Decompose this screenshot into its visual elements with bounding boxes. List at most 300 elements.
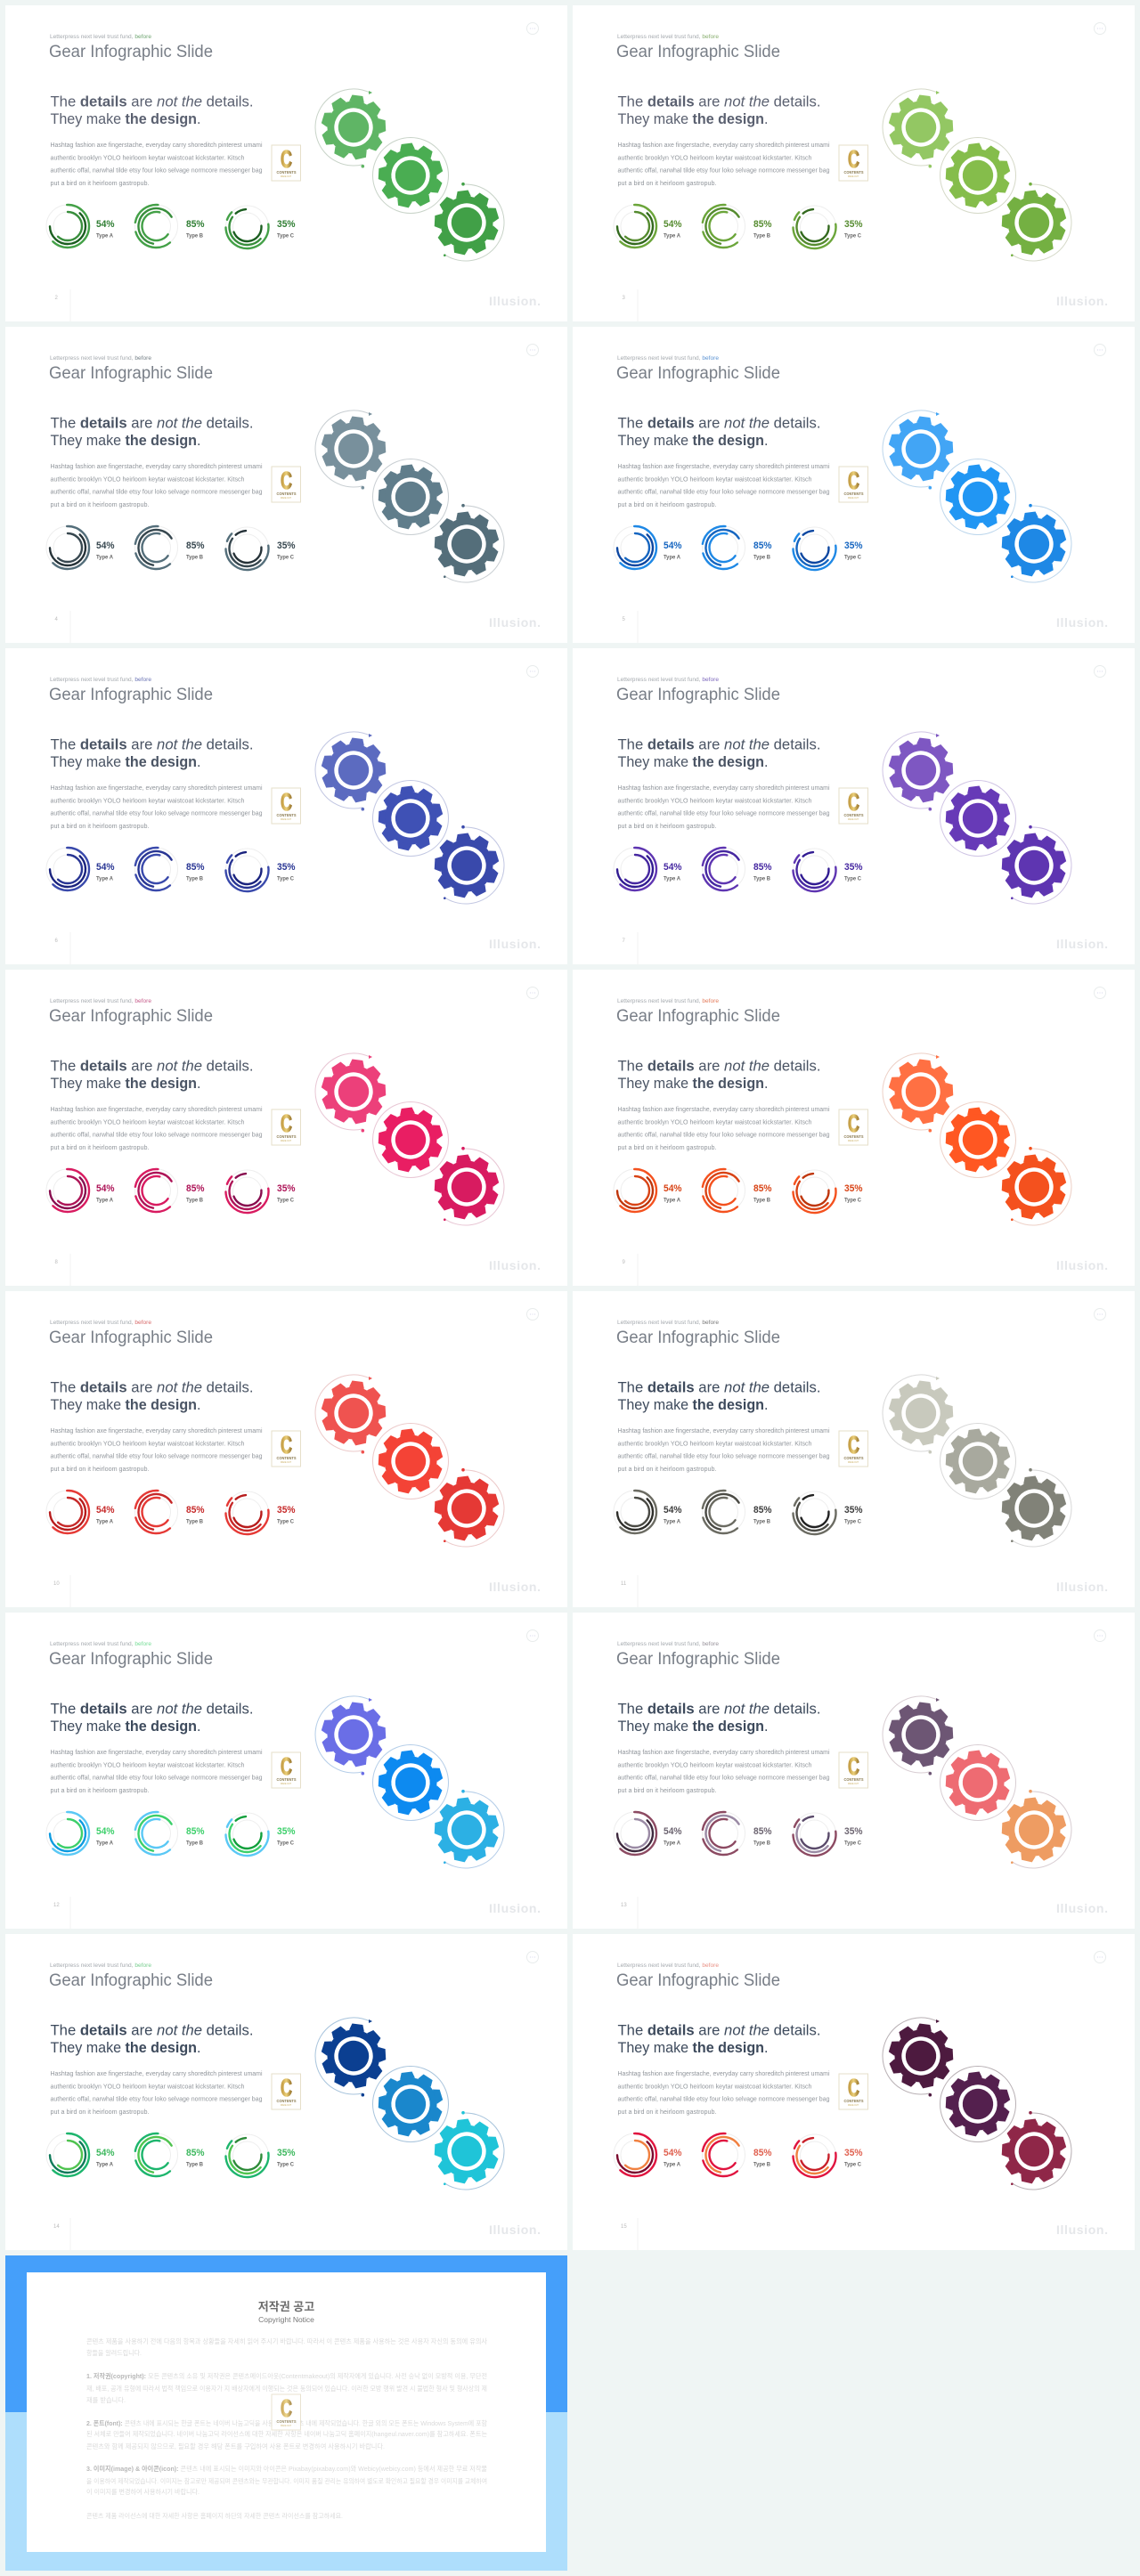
- logo: C: [848, 145, 859, 173]
- body text: [50, 785, 263, 830]
- donut chart: Type C: 35%: [277, 1826, 296, 1837]
- notice body text: 재, 배포, 공개 유형에 따라서 법적 책임으로 이용자가 지 배상자에게 이행되는 것은 동의되어 있습니다. 이러한 모방 행위 발견 시 불법한 형사 및 형사상의 제: [86, 2384, 487, 2393]
- logo: [272, 467, 301, 502]
- slide background: [573, 327, 1135, 643]
- logo: CONTENTS: [276, 492, 297, 496]
- donut chart: Type C: 35%: [844, 1183, 863, 1194]
- slide background: [5, 327, 567, 643]
- donut chart: Type C: 35%: [844, 219, 863, 230]
- blue backdrop top: [5, 2255, 567, 2412]
- headline: The details are not the details.: [618, 1378, 821, 1396]
- donut chart: Type B: Type B: [186, 233, 203, 239]
- donut chart: Type C: 35%: [844, 2148, 863, 2158]
- title: Gear Infographic Slide: [616, 1329, 780, 1347]
- body text: authentic offal, narwhal tilde etsy four loko selvage normcore messenger bag: [50, 2096, 263, 2103]
- donut chart: Type B: 85%: [186, 540, 205, 551]
- logo: CONTENTS: [844, 813, 864, 817]
- donut chart: Type C: Type C: [277, 1840, 294, 1847]
- notice title: 저작권 공고: [258, 2300, 314, 2313]
- logo: MAKE OUT: [281, 1139, 291, 1142]
- logo: [272, 1752, 301, 1788]
- brand: Illusion.: [489, 294, 541, 308]
- logo: [839, 1109, 867, 1145]
- donut chart: Type B: Type B: [186, 1840, 203, 1847]
- gear 2 with orbit ring: [940, 1423, 1015, 1499]
- page number: 7: [622, 939, 625, 944]
- eyebrow text: Letterpress next level trust fund, before: [50, 355, 151, 362]
- logo: C: [281, 1752, 292, 1780]
- panel: slide 8 pink: [5, 970, 567, 1286]
- title: Gear Infographic Slide: [49, 1650, 213, 1669]
- body text: put a bird on it heirloom gastropub.: [50, 502, 150, 508]
- headline: The details are not the details.: [50, 1058, 253, 1074]
- donut chart: Type B: 85%: [753, 2148, 772, 2158]
- headline: [50, 735, 253, 770]
- eyebrow text: Letterpress next level trust fund, before: [617, 34, 719, 40]
- headline: The details are not the details.: [50, 415, 253, 431]
- notice body text: 이 이미지를 변경하여 사용하시기 바랍니다.: [86, 2487, 200, 2496]
- logo: CONTENTS: [276, 2099, 297, 2103]
- donut chart: Type A: 54%: [664, 540, 682, 551]
- donut chart: Type A: Type A: [664, 233, 680, 239]
- donut chart: Type C: [787, 2128, 863, 2183]
- donut chart: Type A: Type A: [96, 2162, 113, 2167]
- body text: Hashtag fashion axe fingerstache, everyday carry shoreditch pinterest umami: [618, 785, 830, 792]
- body text: put a bird on it heirloom gastropub.: [618, 181, 717, 187]
- donut chart: Type A: [43, 1808, 115, 1858]
- donut chart: Type B: [694, 839, 772, 899]
- donut chart: Type A: 54%: [664, 1505, 682, 1516]
- page number: 13: [621, 1903, 627, 1908]
- body text: Hashtag fashion axe fingerstache, everyday carry shoreditch pinterest umami: [618, 1428, 830, 1434]
- logo: CONTENTS: [844, 1134, 864, 1139]
- gear 2 with orbit ring: [372, 1423, 449, 1499]
- headline: [618, 1058, 821, 1092]
- logo: CONTENTS: [276, 1134, 297, 1139]
- donut chart: Type B: [126, 1803, 205, 1864]
- title: Gear Infographic Slide: [49, 364, 213, 383]
- gear 3 with orbit arrow: [424, 502, 508, 586]
- body text: authentic brooklyn YOLO heirloom keytar waistcoat kickstarter. Kitsch: [50, 798, 245, 805]
- headline: The details are not the details.: [618, 2021, 821, 2039]
- donut chart: Type B: Type B: [186, 554, 203, 561]
- icon: more menu: [1094, 666, 1106, 677]
- donut chart: Type B: Type B: [753, 1519, 770, 1524]
- notice body text: [86, 2336, 487, 2520]
- body text: authentic brooklyn YOLO heirloom keytar waistcoat kickstarter. Kitsch: [618, 1120, 812, 1125]
- donut chart: Type A: [43, 844, 115, 894]
- body text: authentic brooklyn YOLO heirloom keytar waistcoat kickstarter. Kitsch: [618, 477, 812, 483]
- headline: They make the design.: [50, 2039, 201, 2056]
- body text: Hashtag fashion axe fingerstache, everyday carry shoreditch pinterest umami: [618, 142, 830, 149]
- donut chart: Type C: Type C: [844, 554, 861, 561]
- icon: more menu: [527, 344, 538, 356]
- body text: authentic brooklyn YOLO heirloom keytar waistcoat kickstarter. Kitsch: [50, 155, 245, 162]
- donut chart: Type B: [126, 2125, 205, 2185]
- body text: Hashtag fashion axe fingerstache, everyday carry shoreditch pinterest umami: [50, 1428, 263, 1434]
- logo: [272, 1109, 301, 1145]
- eyebrow text: Letterpress next level trust fund, before: [50, 998, 151, 1004]
- body text: authentic brooklyn YOLO heirloom keytar waistcoat kickstarter. Kitsch: [50, 1763, 245, 1768]
- body text: authentic offal, narwhal tilde etsy four loko selvage normcore messenger bag: [50, 1776, 263, 1781]
- logo: CONTENTS: [276, 1456, 297, 1460]
- donut chart: Type C: 35%: [277, 219, 296, 230]
- panel: slide 14 navy blue teal: [5, 1934, 567, 2250]
- eyebrow text: Letterpress next level trust fund, before: [617, 1320, 719, 1326]
- panel: slide 4 blue grey: [5, 327, 567, 643]
- donut chart: Type A: [43, 2130, 115, 2180]
- logo: C: [281, 467, 292, 494]
- donut chart: Type B: 85%: [186, 1826, 205, 1837]
- body text: authentic offal, narwhal tilde etsy four loko selvage normcore messenger bag: [618, 810, 830, 817]
- logo: C: [848, 2074, 859, 2101]
- headline: [618, 93, 821, 127]
- gear 2 with orbit ring: [372, 137, 449, 214]
- donut chart: Type B: [694, 2125, 772, 2185]
- donut chart: Type B: Type B: [186, 1197, 203, 1204]
- notice body text: 2. 폰트(font): 콘텐츠 내에 표시되는 한글 폰트는 네이버 나눔고딕을 사용하여 콘텐츠 내에 제작되었습니다. 한글 외의 모든 폰트는 Windows System에 포함: [86, 2418, 487, 2427]
- logo: CONTENTS: [844, 170, 864, 175]
- body text: Hashtag fashion axe fingerstache, everyday carry shoreditch pinterest umami: [618, 1107, 830, 1113]
- gear 2 with orbit ring: [372, 459, 449, 534]
- logo: C: [281, 1431, 292, 1459]
- donut chart: Type B: Type B: [753, 876, 770, 882]
- logo: MAKE OUT: [848, 496, 859, 500]
- logo: [272, 788, 301, 824]
- headline: They make the design.: [50, 1396, 201, 1413]
- donut chart: Type B: [126, 1482, 205, 1542]
- body text: [618, 1107, 830, 1151]
- headline: They make the design.: [618, 1396, 768, 1413]
- donut chart: Type C: Type C: [277, 554, 294, 561]
- donut chart: Type C: [220, 1164, 296, 1219]
- icon: more menu: [1094, 344, 1106, 356]
- title: Gear Infographic Slide: [616, 43, 780, 61]
- body text: [50, 464, 263, 508]
- logo: MAKE OUT: [281, 1782, 291, 1785]
- donut chart: Type A: [43, 1487, 115, 1537]
- donut chart: Type A: [610, 1487, 682, 1537]
- gear 3 with orbit arrow: [991, 1467, 1075, 1550]
- icon: more menu: [1094, 1629, 1106, 1642]
- donut chart: Type C: [220, 2128, 296, 2183]
- page number: 10: [53, 1581, 60, 1587]
- donut chart: Type B: 85%: [753, 1505, 772, 1516]
- gear 2 with orbit ring: [940, 1745, 1015, 1820]
- donut chart: Type C: Type C: [277, 233, 294, 239]
- headline: They make the design.: [50, 432, 201, 449]
- donut chart: Type B: 85%: [186, 1505, 205, 1516]
- donut chart: Type C: 35%: [277, 1183, 296, 1194]
- gear 3 with orbit arrow: [991, 824, 1075, 907]
- slide background: [573, 1934, 1135, 2250]
- donut chart: Type C: Type C: [844, 1519, 861, 1524]
- donut chart: Type B: [126, 839, 205, 899]
- donut chart: Type B: [694, 517, 772, 578]
- title: Gear Infographic Slide: [616, 1650, 780, 1669]
- headline: They make the design.: [618, 1075, 768, 1092]
- donut chart: Type A: [43, 1166, 115, 1215]
- headline: The details are not the details.: [618, 1701, 821, 1717]
- logo: C: [848, 1752, 859, 1780]
- donut chart: Type B: Type B: [753, 554, 770, 561]
- body text: authentic offal, narwhal tilde etsy four loko selvage normcore messenger bag: [618, 1776, 830, 1781]
- body text: put a bird on it heirloom gastropub.: [618, 1788, 717, 1794]
- logo: MAKE OUT: [281, 1460, 291, 1464]
- body text: authentic brooklyn YOLO heirloom keytar waistcoat kickstarter. Kitsch: [50, 1441, 245, 1448]
- headline: The details are not the details.: [50, 735, 253, 753]
- notice subtitle: Copyright Notice: [258, 2315, 314, 2324]
- headline: [618, 735, 821, 770]
- donut chart: Type C: 35%: [277, 2148, 296, 2158]
- donut chart: Type C: Type C: [277, 1519, 294, 1524]
- body text: [618, 1428, 830, 1473]
- headline: They make the design.: [50, 110, 201, 127]
- gear 2 with orbit ring: [940, 137, 1015, 214]
- body text: [618, 2071, 830, 2116]
- logo: C: [848, 1431, 859, 1459]
- body text: authentic brooklyn YOLO heirloom keytar waistcoat kickstarter. Kitsch: [618, 1441, 812, 1448]
- headline: The details are not the details.: [618, 1058, 821, 1074]
- panel: slide 2 green: [5, 5, 567, 321]
- headline: [618, 415, 821, 449]
- brand: Illusion.: [489, 1258, 541, 1272]
- title: Gear Infographic Slide: [49, 1971, 213, 1990]
- donut chart: Type B: Type B: [753, 1197, 770, 1204]
- panel: copyright notice: [5, 2255, 567, 2571]
- title: Gear Infographic Slide: [49, 1329, 213, 1347]
- eyebrow text: Letterpress next level trust fund, before: [50, 1320, 151, 1326]
- notice body text: 3. 이미지(image) & 아이콘(icon): 콘텐츠 내에 표시되는 이미지와 아이콘은 Pixabay(pixabay.com)와 Webicy(webicy.com) 등에서 제공한 무료 저작물: [86, 2464, 487, 2473]
- headline: The details are not the details.: [50, 1378, 253, 1396]
- donut chart: Type A: 54%: [664, 1826, 682, 1837]
- body text: put a bird on it heirloom gastropub.: [618, 502, 717, 508]
- eyebrow text: Letterpress next level trust fund, before: [617, 677, 719, 683]
- logo: MAKE OUT: [848, 2103, 859, 2107]
- page number: 4: [55, 617, 59, 622]
- donut chart: Type C: 35%: [844, 1826, 863, 1837]
- brand: Illusion.: [489, 937, 541, 951]
- panel: slide 3 light green: [573, 5, 1135, 321]
- gear 1 with orbit arrow: [307, 2010, 400, 2102]
- headline: They make the design.: [618, 753, 768, 770]
- donut chart: Type C: [787, 842, 863, 898]
- logo: CONTENTS: [844, 2099, 864, 2103]
- gear 2 with orbit ring: [940, 780, 1015, 857]
- brand: Illusion.: [489, 615, 541, 630]
- eyebrow text: Letterpress next level trust fund, before: [617, 355, 719, 362]
- notice body text: 콘텐츠 제품 라이선스에 대한 자세한 사항은 홈페이지 하단의 자세한 콘텐츠 라이선스를 참고하세요.: [86, 2511, 343, 2520]
- donut chart: Type B: 85%: [753, 219, 772, 230]
- logo: [839, 1431, 867, 1467]
- logo: CONTENTS: [844, 1777, 864, 1782]
- body text: put a bird on it heirloom gastropub.: [50, 181, 150, 187]
- brand: Illusion.: [1056, 1901, 1108, 1915]
- logo: [839, 788, 867, 824]
- page number: 2: [55, 296, 59, 301]
- gear 2 with orbit ring: [372, 2066, 449, 2142]
- eyebrow text: Letterpress next level trust fund, before: [617, 1962, 719, 1969]
- body text: Hashtag fashion axe fingerstache, everyday carry shoreditch pinterest umami: [50, 1750, 263, 1756]
- headline: [50, 93, 253, 127]
- donut chart: Type C: [787, 1485, 863, 1540]
- gear 3 with orbit arrow: [424, 1145, 508, 1229]
- headline: They make the design.: [50, 1718, 201, 1735]
- eyebrow text: Letterpress next level trust fund, before: [617, 1641, 719, 1647]
- donut chart: Type C: 35%: [844, 540, 863, 551]
- logo: C: [848, 467, 859, 494]
- notice body text: 을 이용하여 제작되었습니다. 이미지는 참고로만 제공되며 콘텐츠와는 무관합니다. 이미지 품질 관리는 유의하여 별도로 확인하고 필요할 경우 이미지를 교체하여: [86, 2476, 487, 2485]
- slide background: [5, 1291, 567, 1607]
- headline: [50, 1058, 253, 1092]
- body text: authentic brooklyn YOLO heirloom keytar waistcoat kickstarter. Kitsch: [618, 155, 812, 162]
- body text: Hashtag fashion axe fingerstache, everyday carry shoreditch pinterest umami: [50, 785, 263, 792]
- logo: MAKE OUT: [281, 496, 291, 500]
- panel: slide 11 warm grey: [573, 1291, 1135, 1607]
- brand: Illusion.: [1056, 2223, 1108, 2237]
- donut chart: Type A: Type A: [664, 1840, 680, 1847]
- body text: put a bird on it heirloom gastropub.: [50, 2109, 150, 2116]
- headline: The details are not the details.: [50, 93, 253, 110]
- headline: They make the design.: [50, 1075, 201, 1092]
- donut chart: Type C: 35%: [277, 1505, 296, 1516]
- gear 3 with orbit arrow: [991, 502, 1075, 586]
- gear 3 with orbit arrow: [991, 1788, 1075, 1872]
- body text: Hashtag fashion axe fingerstache, everyday carry shoreditch pinterest umami: [618, 464, 830, 470]
- gear 3 with orbit arrow: [424, 181, 508, 264]
- logo: [839, 1752, 867, 1788]
- brand: Illusion.: [1056, 1580, 1108, 1594]
- donut chart: Type C: Type C: [277, 2162, 294, 2167]
- logo: C: [848, 1109, 859, 1137]
- body text: authentic brooklyn YOLO heirloom keytar waistcoat kickstarter. Kitsch: [50, 2084, 245, 2091]
- body text: authentic brooklyn YOLO heirloom keytar waistcoat kickstarter. Kitsch: [50, 1120, 245, 1125]
- donut chart: Type A: 54%: [96, 1826, 115, 1837]
- title: Gear Infographic Slide: [616, 1971, 780, 1990]
- donut chart: Type C: [787, 199, 863, 255]
- logo: CONTENTS: [844, 1456, 864, 1460]
- logo: C: [281, 1109, 292, 1137]
- donut chart: Type C: [220, 842, 296, 898]
- donut chart: Type B: Type B: [753, 1840, 770, 1847]
- gear 3 with orbit arrow: [991, 2109, 1075, 2193]
- logo: [272, 145, 301, 181]
- gear 3 with orbit arrow: [991, 181, 1075, 264]
- donut chart: Type A: Type A: [664, 1519, 680, 1524]
- icon: more menu: [1094, 1309, 1106, 1320]
- donut chart: Type B: Type B: [186, 1519, 203, 1524]
- gear 3 with orbit arrow: [424, 2109, 508, 2193]
- gear 1 with orbit arrow: [307, 402, 400, 495]
- donut chart: Type B: [126, 1160, 205, 1221]
- body text: Hashtag fashion axe fingerstache, everyday carry shoreditch pinterest umami: [618, 2071, 830, 2077]
- body text: authentic offal, narwhal tilde etsy four loko selvage normcore messenger bag: [50, 1133, 263, 1138]
- slide background: [573, 1291, 1135, 1607]
- donut chart: Type C: [220, 1807, 296, 1862]
- logo: [839, 145, 867, 181]
- logo: [839, 467, 867, 502]
- donut chart: Type A: [610, 201, 682, 251]
- body text: authentic offal, narwhal tilde etsy four loko selvage normcore messenger bag: [618, 2096, 830, 2103]
- logo: MAKE OUT: [848, 175, 859, 178]
- body text: authentic brooklyn YOLO heirloom keytar waistcoat kickstarter. Kitsch: [618, 2084, 812, 2091]
- donut chart: Type A: 54%: [664, 2148, 682, 2158]
- logo: CONTENTS: [844, 492, 864, 496]
- slide background: [5, 970, 567, 1286]
- panel: slide 7 deep purple: [573, 648, 1135, 964]
- body text: authentic offal, narwhal tilde etsy four loko selvage normcore messenger bag: [618, 490, 830, 495]
- donut chart: Type A: 54%: [96, 2148, 115, 2158]
- slide background: [5, 648, 567, 964]
- brand: Illusion.: [489, 1901, 541, 1915]
- logo: MAKE OUT: [848, 1139, 859, 1142]
- body text: authentic brooklyn YOLO heirloom keytar waistcoat kickstarter. Kitsch: [50, 477, 245, 483]
- donut chart: Type A: Type A: [664, 2162, 680, 2167]
- donut chart: Type A: [43, 201, 115, 251]
- headline: They make the design.: [618, 2039, 768, 2056]
- eyebrow text: Letterpress next level trust fund, before: [50, 1962, 151, 1969]
- page number: 5: [622, 617, 625, 622]
- eyebrow text: Letterpress next level trust fund, before: [50, 1641, 151, 1647]
- title: Gear Infographic Slide: [616, 686, 780, 704]
- gear 1 with orbit arrow: [307, 81, 400, 174]
- gear 1 with orbit arrow: [875, 2010, 967, 2102]
- body text: [50, 1428, 263, 1473]
- donut chart: Type C: Type C: [844, 1197, 861, 1204]
- icon: more menu: [1094, 1952, 1106, 1962]
- panel: slide 15 burgundy: [573, 1934, 1135, 2250]
- donut chart: Type C: Type C: [844, 233, 861, 239]
- donut chart: Type A: [610, 844, 682, 894]
- title: Gear Infographic Slide: [616, 364, 780, 383]
- donut chart: Type B: 85%: [753, 1826, 772, 1837]
- slide background: [573, 5, 1135, 321]
- brand: Illusion.: [489, 2223, 541, 2237]
- body text: Hashtag fashion axe fingerstache, everyday carry shoreditch pinterest umami: [50, 464, 263, 470]
- donut chart: Type A: 54%: [96, 1183, 115, 1194]
- eyebrow text: Letterpress next level trust fund, before: [50, 34, 151, 40]
- gear 2 with orbit ring: [372, 1102, 449, 1177]
- donut chart: Type C: Type C: [844, 2162, 861, 2167]
- body text: Hashtag fashion axe fingerstache, everyday carry shoreditch pinterest umami: [50, 1107, 263, 1113]
- body text: [50, 142, 263, 187]
- notice body text: 항들을 알려드립니다.: [86, 2348, 142, 2357]
- donut chart: Type A: 54%: [96, 540, 115, 551]
- donut chart: Type B: 85%: [186, 1183, 205, 1194]
- logo: [272, 1431, 301, 1467]
- logo: C: [281, 145, 292, 173]
- gear 3 with orbit arrow: [424, 1788, 508, 1872]
- logo: CONTENTS: [276, 2419, 297, 2424]
- gear 1 with orbit arrow: [875, 724, 967, 817]
- donut chart: Type C: [220, 521, 296, 576]
- logo: MAKE OUT: [281, 2424, 291, 2427]
- gear 1 with orbit arrow: [307, 1688, 400, 1781]
- logo: MAKE OUT: [281, 817, 291, 821]
- headline: They make the design.: [50, 753, 201, 770]
- brand: Illusion.: [1056, 1258, 1108, 1272]
- donut chart: Type A: 54%: [664, 862, 682, 873]
- donut chart: Type C: [787, 521, 863, 576]
- donut chart: Type A: Type A: [96, 1840, 113, 1847]
- body text: authentic offal, narwhal tilde etsy four loko selvage normcore messenger bag: [618, 1453, 830, 1460]
- panel: slide 5 blue: [573, 327, 1135, 643]
- logo: C: [281, 2074, 292, 2101]
- icon: more menu: [527, 987, 538, 999]
- gear 2 with orbit ring: [372, 780, 449, 857]
- body text: authentic brooklyn YOLO heirloom keytar waistcoat kickstarter. Kitsch: [618, 798, 812, 805]
- logo: MAKE OUT: [848, 817, 859, 821]
